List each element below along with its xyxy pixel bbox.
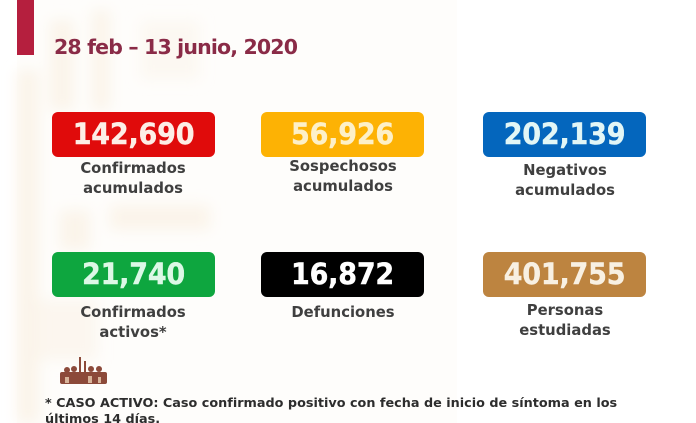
stat box: sospechosos acumulados [261, 112, 424, 157]
footnote: caso activo definition: * CASO ACTIVO: Caso confirmado positivo con fecha de inicio de síntoma en los [45, 396, 617, 411]
date heading: 28 feb – 13 junio, 2020 [54, 35, 297, 59]
stat box: personas estudiadas [483, 252, 646, 297]
icon: historic figures illustration [60, 357, 107, 384]
label: confirmados acumulados: Confirmados [80, 160, 186, 177]
label: sospechosos acumulados: acumulados [293, 178, 393, 194]
label: confirmados acumulados: acumulados [83, 180, 183, 196]
stat box: defunciones [261, 252, 424, 297]
label: confirmados activos [80, 304, 186, 340]
label: defunciones: Defunciones [291, 304, 395, 321]
footnote: caso activo definition [45, 396, 617, 423]
stat box: personas estudiadas: 401,755 [504, 257, 625, 292]
stat box: negativos acumulados: 202,139 [504, 117, 625, 152]
label: negativos acumulados [515, 162, 615, 198]
stat box: confirmados acumulados: 142,690 [73, 117, 194, 152]
label: confirmados activos: Confirmados [80, 304, 186, 321]
stat box: confirmados activos: 21,740 [82, 257, 185, 292]
label: negativos acumulados: Negativos [523, 162, 607, 179]
stat box: confirmados activos [52, 252, 215, 297]
label: confirmados acumulados [80, 160, 186, 196]
stat box: negativos acumulados [483, 112, 646, 157]
stat box: confirmados acumulados [52, 112, 215, 157]
label: sospechosos acumulados [289, 158, 397, 194]
label: personas estudiadas: Personas [527, 302, 603, 319]
stat box: defunciones: 16,872 [291, 257, 394, 292]
stat box: sospechosos acumulados: 56,926 [291, 117, 394, 152]
label: personas estudiadas [519, 302, 611, 338]
label: negativos acumulados: acumulados [515, 182, 615, 198]
label: confirmados activos: activos* [99, 324, 167, 340]
label: sospechosos acumulados: Sospechosos [289, 158, 397, 175]
red header bar [17, 0, 34, 55]
label: personas estudiadas: estudiadas [519, 322, 611, 338]
